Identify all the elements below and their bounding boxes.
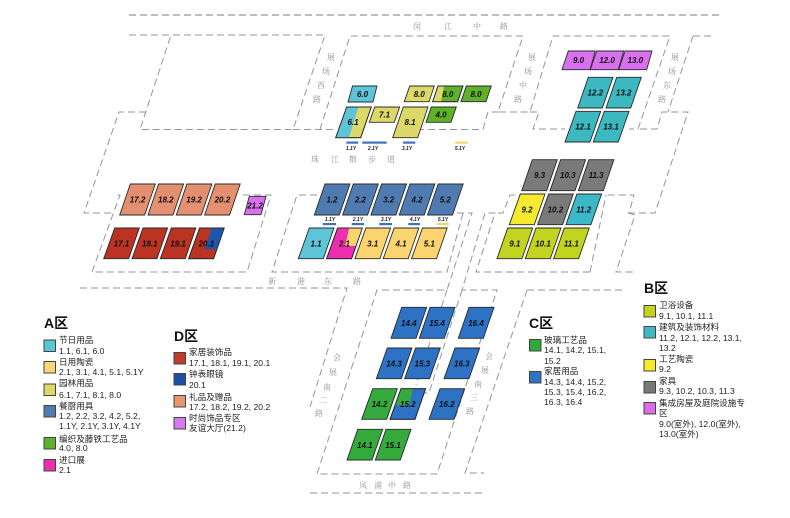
road label: fengpu road <box>359 480 411 491</box>
road label: south road 2: 展 <box>329 367 337 378</box>
legend item: craft ceramics: 9.2 <box>659 364 671 374</box>
road label: middle exhibition road: 展 <box>528 52 536 63</box>
hall 20.1 <box>189 228 224 259</box>
zone D halls <box>104 184 266 259</box>
legend item: household goods: 15.3, 15.4, 16.2, <box>544 387 606 397</box>
road network dashed outlines <box>80 15 719 493</box>
legend item: import show <box>44 455 85 475</box>
hall 19.1 <box>160 228 196 259</box>
hall 6.0: 6.0 <box>357 90 369 99</box>
road label: west exhibition road <box>313 52 335 105</box>
hall 3.1Y upper: 3.1Y <box>402 146 413 152</box>
hall 14.3: 14.3 <box>386 360 402 368</box>
road label: fengpu road: 路 <box>403 480 411 491</box>
legend item: integrated housing: 集成房屋及庭院设施专 <box>659 397 745 408</box>
hall 17.2: 17.2 <box>130 196 146 204</box>
legend item: tableware: 1.2, 2.2, 3.2, 4.2, 5.2, <box>59 411 140 421</box>
hall 11.3 <box>578 160 614 191</box>
hall 2.2: 2.2 <box>354 196 367 204</box>
hall 20.1: 20.1 <box>198 240 215 248</box>
legend item: clocks and glasses <box>174 368 224 390</box>
road label: xingang east road: 新 <box>268 276 276 287</box>
hall 15.2 <box>390 389 426 419</box>
hall 4.0 <box>426 107 456 122</box>
legend item: woven crafts: 4.0, 8.0 <box>59 443 88 453</box>
legend item: household goods: 14.3, 14.4, 15.2, <box>544 377 606 387</box>
hall 10.1: 10.1 <box>535 240 551 248</box>
hall 19.2: 19.2 <box>186 196 202 204</box>
road label: west exhibition road: 场 <box>322 66 330 77</box>
hall 8.0 middle: 8.0 <box>442 90 454 99</box>
hall 18.2 <box>148 184 184 215</box>
road label: south road 2: 南 <box>323 382 331 393</box>
legend item: garden goods: 6.1, 7.1, 8.1, 8.0 <box>59 390 121 400</box>
hall 5.2 <box>428 184 463 215</box>
road label: promenade: 道 <box>387 154 395 165</box>
legend item: festival goods: 节日用品 <box>59 335 93 345</box>
hall 14.2: 14.2 <box>372 400 388 409</box>
legend item: daily ceramics <box>44 356 144 377</box>
zone C halls <box>347 307 494 460</box>
legend item: household goods: 16.3, 16.4 <box>544 397 582 407</box>
hall 2.1Y upper: 2.1Y <box>367 146 379 152</box>
hall 10.3 <box>550 160 586 191</box>
legend item: festival goods: 1.1, 6.1, 6.0 <box>59 346 105 356</box>
hall 1.1Y lower: 1.1Y <box>325 217 336 223</box>
hall 4.0: 4.0 <box>434 110 447 120</box>
hall 17.1 <box>104 228 139 259</box>
legend item: bathroom equipment <box>644 299 714 321</box>
heading: A zone: A区 <box>44 315 68 331</box>
legend: zone C <box>529 315 606 407</box>
legend item: woven crafts <box>44 433 128 453</box>
legend item: import show: 2.1 <box>59 465 71 475</box>
road label: promenade: 散 <box>349 154 357 165</box>
hall 15.4 <box>419 307 455 338</box>
hall 20.2: 20.2 <box>214 196 231 204</box>
upper Y halls <box>346 142 468 152</box>
road label: south road 2: 路 <box>315 408 323 419</box>
road label: fengpu road: 中 <box>388 480 396 491</box>
hall 5.2: 5.2 <box>440 196 451 204</box>
road label: promenade: 步 <box>368 154 376 165</box>
hall 6.1 <box>336 107 371 138</box>
road label: promenade: 江 <box>331 154 339 165</box>
road label: east exhibition road: 展 <box>671 52 679 63</box>
legend item: clocks and glasses: 20.1 <box>189 380 206 390</box>
hall 4.1Y lower: 4.1Y <box>409 217 421 223</box>
legend: zone D <box>174 328 270 433</box>
hall 13.1 <box>593 111 629 142</box>
hall 16.4 <box>458 307 494 338</box>
road label: south road 2: 二 <box>319 395 327 406</box>
road label: top road <box>413 21 508 32</box>
legend item: clocks and glasses: 钟表眼镜 <box>189 368 224 379</box>
hall 2.1 <box>327 228 362 259</box>
hall 8.0 right <box>461 86 491 102</box>
legend item: furniture <box>644 375 735 396</box>
hall 21.2 <box>244 196 266 215</box>
hall 12.2: 12.2 <box>588 88 604 98</box>
legend item: integrated housing: 区 <box>659 408 668 418</box>
road label: xingang east road: 路 <box>353 276 361 287</box>
hall 12.0: 12.0 <box>599 56 615 65</box>
road label: top road: 路 <box>500 21 508 32</box>
hall 9.3 <box>522 160 557 191</box>
hall 4.2 <box>399 184 435 215</box>
legend item: fashion accessories <box>174 412 246 433</box>
hall 9.0 <box>562 51 595 70</box>
hall 1.2 <box>314 184 350 215</box>
road label: south road 3 <box>466 351 493 417</box>
road label: south road 3: 三 <box>470 392 478 403</box>
hall 5.1Y lower: 5.1Y <box>438 217 449 223</box>
hall 8.0 middle <box>433 86 463 102</box>
hall 1.1Y upper: 1.1Y <box>346 146 357 152</box>
road labels <box>268 21 679 491</box>
legend item: integrated housing <box>644 397 745 439</box>
hall 6.0 <box>348 86 377 102</box>
hall 10.2: 10.2 <box>548 206 564 214</box>
hall 8.0 left <box>404 86 434 102</box>
hall 19.2 <box>176 184 212 215</box>
legend item: fashion accessories: 友谊大厅(21.2) <box>189 422 246 433</box>
road label: west exhibition road: 西 <box>317 80 325 91</box>
hall 15.1 <box>375 429 411 460</box>
hall 15.2: 15.2 <box>400 400 416 409</box>
hall 9.0: 9.0 <box>573 56 585 65</box>
hall 17.1: 17.1 <box>114 240 130 248</box>
legend: zone B <box>644 280 745 439</box>
hall 12.0 <box>590 51 624 70</box>
hall 14.1 <box>347 429 383 460</box>
legend item: integrated housing: 13.0(室外) <box>659 428 699 439</box>
hall 17.2 <box>120 184 155 215</box>
legend item: garden goods <box>44 377 121 400</box>
hall 11.2 <box>566 194 602 225</box>
hall 11.3: 11.3 <box>589 171 604 180</box>
heading: D zone: D区 <box>174 328 198 344</box>
legend item: import show: 进口展 <box>59 455 85 465</box>
road label: middle exhibition road: 中 <box>519 80 527 91</box>
hall 1.1: 1.1 <box>310 240 322 248</box>
legend item: craft ceramics: 工艺陶瓷 <box>659 353 694 364</box>
legend item: building materials: 13.2 <box>659 343 676 353</box>
legend item: bathroom equipment: 9.1, 10.1, 11.1 <box>659 311 714 321</box>
hall 9.3: 9.3 <box>534 171 546 180</box>
hall 14.2 <box>362 389 397 419</box>
legend item: tableware: 餐厨用具 <box>59 401 94 411</box>
legend item: building materials: 建筑及装饰材料 <box>659 321 720 332</box>
hall 13.2: 13.2 <box>616 88 632 98</box>
legend item: furniture: 9.3, 10.2, 10.3, 11.3 <box>659 386 735 396</box>
hall 10.2 <box>538 194 573 225</box>
hall 8.1 <box>393 107 428 138</box>
hall 1.2: 1.2 <box>326 196 338 204</box>
hall 11.2: 11.2 <box>576 206 592 214</box>
legend item: daily ceramics: 2.1, 3.1, 4.1, 5.1, 5.1Y <box>59 367 144 377</box>
road label: xingang east road: 港 <box>297 276 305 287</box>
legend item: tableware <box>44 401 141 431</box>
hall 13.0: 13.0 <box>628 56 644 65</box>
hall 4.1: 4.1 <box>394 240 407 248</box>
hall 14.4 <box>391 307 427 338</box>
road label: south road 3: 展 <box>481 365 489 376</box>
hall 3.2 <box>371 184 407 215</box>
hall 19.1: 19.1 <box>170 240 186 248</box>
hall 9.2: 9.2 <box>521 206 533 214</box>
road label: promenade <box>311 154 395 165</box>
legend item: woven crafts: 编织及藤铁工艺品 <box>59 433 128 444</box>
hall 18.2: 18.2 <box>158 196 174 204</box>
legend item: gifts: 17.2, 18.2, 19.2, 20.2 <box>189 402 270 412</box>
road label: south road 3: 路 <box>466 406 474 417</box>
hall 14.3 <box>376 348 412 379</box>
hall 13.2 <box>606 77 641 108</box>
legend item: household goods <box>530 365 606 407</box>
road label: top road: 江 <box>444 21 452 32</box>
hall 15.4: 15.4 <box>429 319 445 328</box>
legend item: household goods: 家居用品 <box>544 365 578 376</box>
hall 15.3 <box>405 348 440 379</box>
hall 6.1: 6.1 <box>347 118 359 127</box>
hall 3.1: 3.1 <box>367 240 379 248</box>
hall 2.2 <box>343 184 378 215</box>
road label: xingang east road <box>268 276 361 287</box>
road label: top road: 闵 <box>413 21 421 32</box>
legend: zone A <box>44 315 144 475</box>
hall 14.4: 14.4 <box>401 319 417 328</box>
hall 9.1: 9.1 <box>509 240 521 248</box>
road label: south road 2: 会 <box>333 352 341 363</box>
hall 9.1 <box>497 228 533 259</box>
legend item: integrated housing: 9.0(室外), 12.0(室外), <box>659 418 741 429</box>
road label: east exhibition road: 场 <box>668 66 676 77</box>
legend item: festival goods <box>44 335 105 356</box>
legend item: glass crafts <box>530 334 606 366</box>
hall 14.1: 14.1 <box>357 441 373 450</box>
hall 2.1Y lower: 2.1Y <box>352 217 364 223</box>
road label: middle exhibition road: 路 <box>514 94 522 105</box>
road label: south road 3: 会 <box>485 351 493 362</box>
road label: south road 2 <box>315 352 341 419</box>
hall 8.0 right: 8.0 <box>470 90 482 99</box>
road label: middle exhibition road: 场 <box>524 66 532 77</box>
road label: west exhibition road: 展 <box>327 52 335 63</box>
hall 16.2 <box>429 389 465 419</box>
road label: middle exhibition road <box>514 52 536 105</box>
road label: top road: 中 <box>473 21 481 32</box>
hall 4.1 <box>383 228 419 259</box>
legend item: home decor: 家居装饰品 <box>189 346 232 357</box>
legend item: tableware: 1.1Y, 2.1Y, 3.1Y, 4.1Y <box>59 421 141 431</box>
legend item: home decor: 17.1, 18.1, 19.1, 20.1 <box>189 358 270 368</box>
road label: fengpu road: 凤 <box>359 480 367 491</box>
hall 8.1: 8.1 <box>404 118 416 127</box>
hall 12.1: 12.1 <box>575 122 591 132</box>
legend item: building materials: 11.2, 12.1, 12.2, 13.1, <box>659 333 742 343</box>
hall 10.3: 10.3 <box>560 171 576 180</box>
hall 2.1: 2.1 <box>338 240 351 248</box>
hall 11.1: 11.1 <box>564 240 579 248</box>
road label: west exhibition road: 路 <box>313 94 321 105</box>
hall 15.1: 15.1 <box>385 441 401 450</box>
legend item: fashion accessories: 时尚饰品专区 <box>189 412 241 423</box>
legend item: glass crafts: 15.2 <box>544 356 561 366</box>
zone A upper halls <box>336 86 491 138</box>
heading: C zone: C区 <box>529 315 553 331</box>
hall 10.1 <box>525 228 561 259</box>
road label: east exhibition road <box>658 52 679 105</box>
hall 16.2: 16.2 <box>439 400 455 409</box>
zone A lower halls <box>298 184 463 259</box>
legend item: gifts: 礼品及赠品 <box>189 391 232 402</box>
hall 3.1Y lower: 3.1Y <box>381 217 392 223</box>
legend item: home decor <box>174 346 270 368</box>
legend item: craft ceramics <box>644 353 694 374</box>
hall 11.1 <box>554 228 589 259</box>
hall 12.2 <box>578 77 613 108</box>
legend item: furniture: 家具 <box>659 375 677 386</box>
hall 16.3 <box>444 348 480 379</box>
hall 7.1 <box>369 107 400 122</box>
road label: east exhibition road: 路 <box>658 94 666 105</box>
hall 16.3: 16.3 <box>454 360 470 368</box>
hall 18.1 <box>132 228 168 259</box>
legend item: gifts <box>174 391 270 412</box>
lower Y halls <box>323 217 449 225</box>
hall 15.3: 15.3 <box>415 360 431 368</box>
hall 5.1 <box>412 228 447 259</box>
hall 21.2: 21.2 <box>246 202 263 210</box>
legend item: daily ceramics: 日用陶瓷 <box>59 356 94 367</box>
hall 16.4: 16.4 <box>468 319 484 328</box>
hall 12.1 <box>565 111 601 142</box>
hall 3.2: 3.2 <box>383 196 395 204</box>
zone B upper halls <box>497 51 652 259</box>
hall 3.1 <box>355 228 391 259</box>
hall 5.1Y upper: 5.1Y <box>455 146 466 152</box>
hall 9.2 <box>509 194 545 225</box>
hall 13.1: 13.1 <box>603 122 619 132</box>
hall 13.0 <box>619 51 652 70</box>
road label: fengpu road: 浦 <box>374 480 382 491</box>
legend item: glass crafts: 14.1, 14.2, 15.1, <box>544 345 606 355</box>
legend item: glass crafts: 玻璃工艺品 <box>544 334 587 345</box>
legend item: building materials <box>644 321 742 353</box>
road label: east exhibition road: 东 <box>663 80 671 91</box>
hall 4.2: 4.2 <box>410 196 423 204</box>
hall 8.0 left: 8.0 <box>414 90 425 99</box>
road label: xingang east road: 东 <box>324 276 332 287</box>
legend item: garden goods: 园林用品 <box>59 377 93 388</box>
hall 1.1 <box>298 228 334 259</box>
hall 18.1: 18.1 <box>142 240 158 248</box>
hall 7.1: 7.1 <box>379 110 391 120</box>
hall 5.1: 5.1 <box>424 240 435 248</box>
road label: promenade: 珠 <box>311 154 319 165</box>
road label: south road 3: 南 <box>474 379 482 390</box>
legend item: bathroom equipment: 卫浴设备 <box>659 299 694 310</box>
hall 20.2 <box>205 184 240 215</box>
heading: B zone: B区 <box>644 280 668 296</box>
